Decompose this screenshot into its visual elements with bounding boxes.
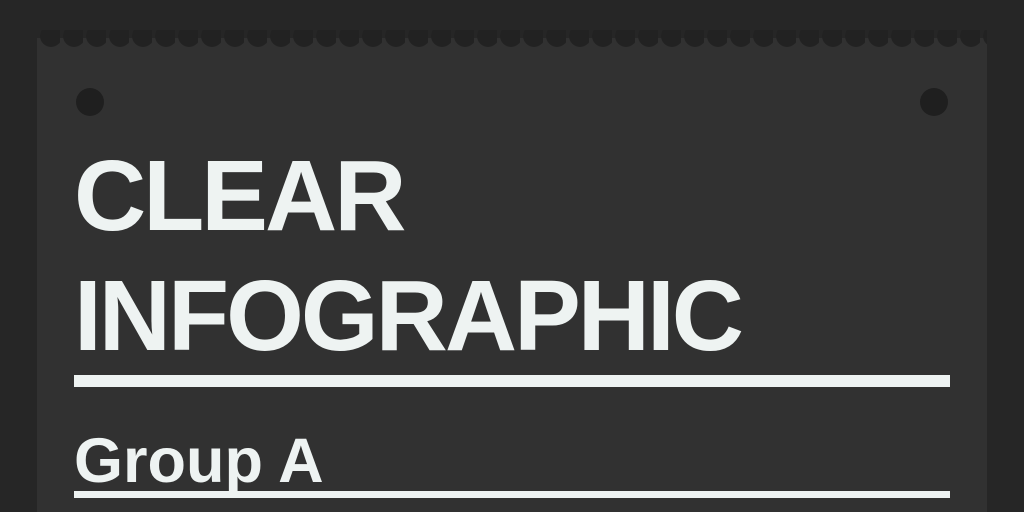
title underline (74, 375, 950, 387)
icon: right pin (920, 88, 948, 116)
heading underline (74, 491, 950, 498)
title (74, 140, 742, 372)
scalloped edge (40, 38, 987, 47)
icon: left pin (76, 88, 104, 116)
title: CLEAR (74, 140, 403, 252)
heading: Group A: Group A (74, 426, 324, 496)
title: INFOGRAPHIC (74, 260, 741, 372)
